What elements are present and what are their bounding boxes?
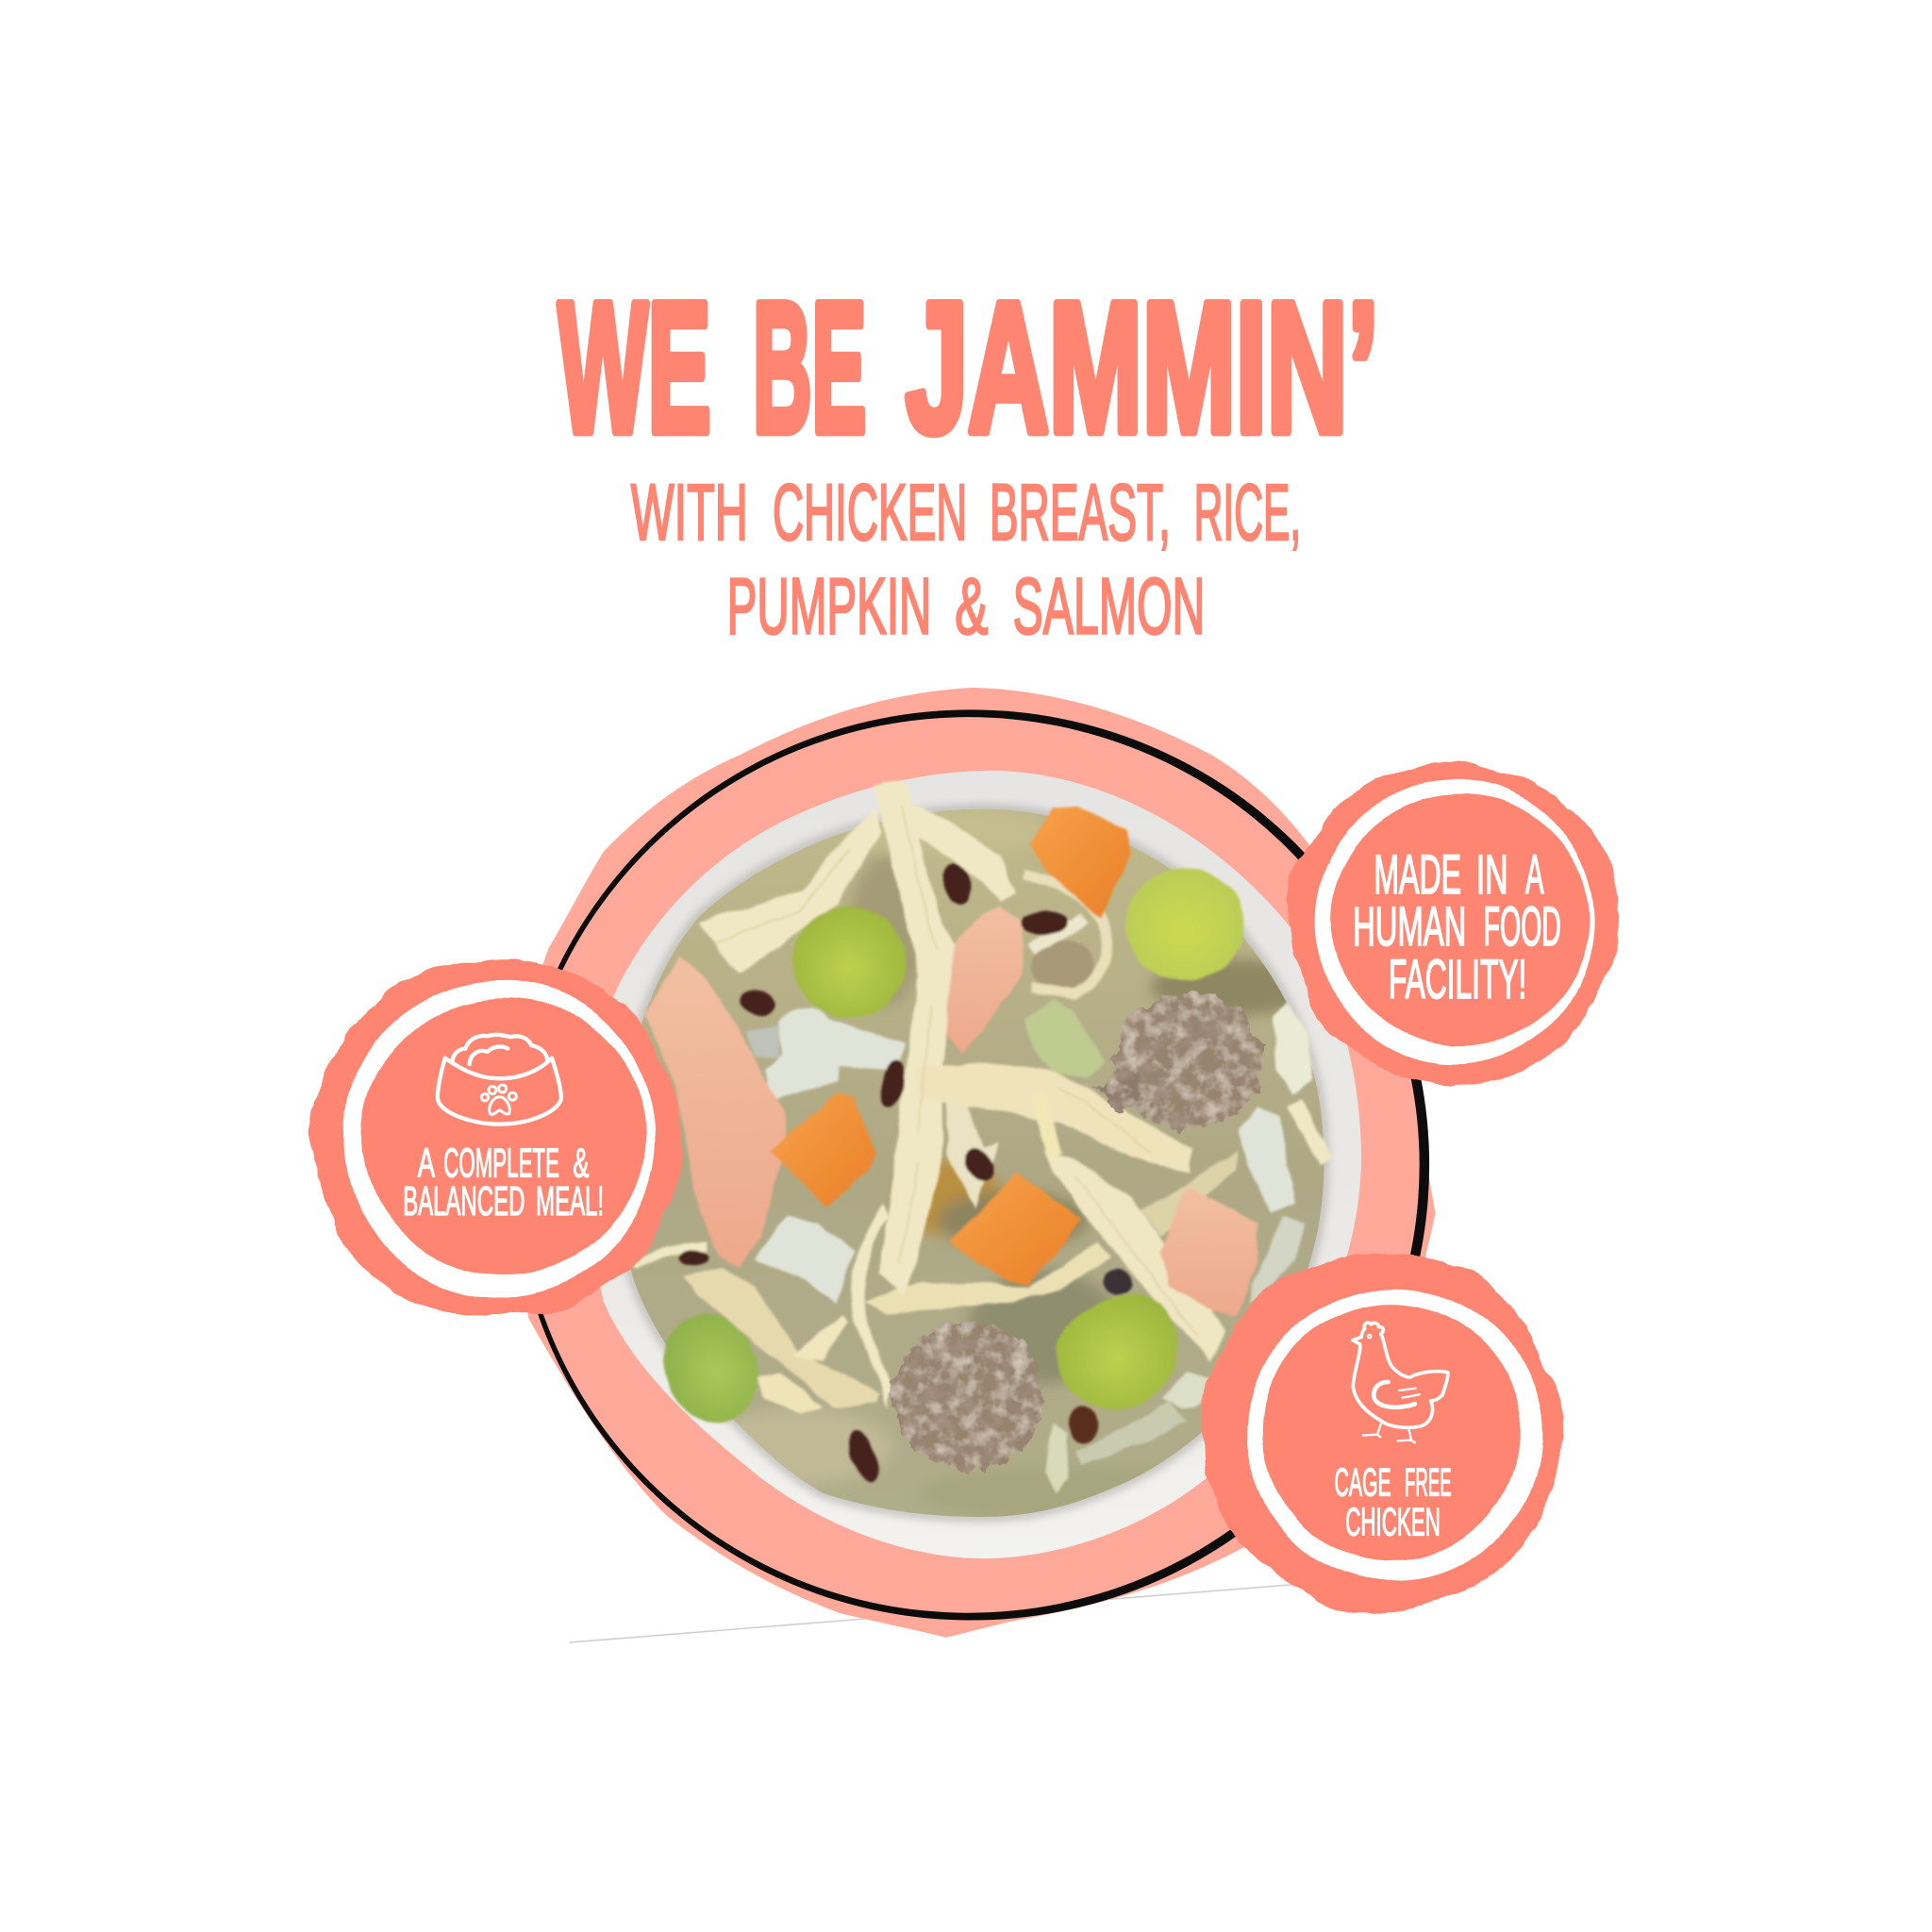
peas and green chunk (649, 869, 1245, 1435)
pink plate (518, 717, 1420, 1613)
food contents (632, 781, 1332, 1493)
noodles (632, 781, 1332, 1413)
badge: complete and balanced meal (311, 958, 684, 1319)
badge text: COMPLETE (443, 1141, 559, 1186)
badge text (403, 1141, 604, 1224)
white ring (343, 981, 656, 1297)
badge text: A (1525, 844, 1544, 906)
carrot pieces (771, 807, 1130, 1288)
badge text: CAGE (1335, 1460, 1391, 1505)
title (558, 264, 1379, 471)
badge disc (311, 958, 684, 1319)
shadow line (569, 1585, 1293, 1642)
badge: cage free chicken (1203, 1251, 1560, 1613)
badge: made in a human food facility (1289, 761, 1619, 1084)
noodle strands (714, 805, 1198, 1337)
bowl inner shadow (624, 809, 1324, 1517)
badge text: IN (1476, 844, 1508, 906)
white ring (1315, 780, 1594, 1063)
subtitle: RICE, (1194, 467, 1301, 557)
subtitle: SALMON (1013, 560, 1205, 650)
badge: made in a human food facility: FOOD (1484, 896, 1561, 958)
subtitle: CHICKEN (773, 467, 967, 557)
badge text: MEAL! (536, 1179, 604, 1224)
badge text (1353, 844, 1561, 1010)
rice chunks (745, 1003, 1313, 1493)
dark beans (679, 861, 1132, 1485)
title: WE (558, 264, 711, 471)
badge text: CHICKEN (1345, 1499, 1441, 1543)
icon: dog bowl (438, 1035, 561, 1124)
subtitle: BREAST, (990, 467, 1171, 557)
black ring (512, 709, 1429, 1621)
pink backing blob (492, 688, 1436, 1638)
badge text: HUMAN (1353, 896, 1466, 958)
subtitle: PUMPKIN (727, 560, 931, 650)
badge text: FACILITY! (1389, 949, 1526, 1010)
badge text (1335, 1460, 1452, 1543)
broth (624, 809, 1324, 1517)
title: JAMMIN’ (906, 264, 1379, 471)
subtitle: & (955, 560, 989, 650)
icon: chicken (1353, 1323, 1448, 1442)
ring noodle (1025, 874, 1107, 993)
badge text: & (573, 1141, 589, 1186)
broth tones (734, 855, 1288, 1517)
title: BE (753, 264, 866, 471)
meatballs (891, 993, 1262, 1470)
badge text: A (418, 1141, 435, 1186)
bowl of food (592, 771, 1361, 1558)
badge text: MADE (1374, 844, 1461, 906)
badge text: BALANCED (403, 1179, 525, 1224)
badge: cage free chicken: FREE (1405, 1460, 1452, 1505)
badge disc (1203, 1251, 1560, 1613)
subtitle (631, 467, 1301, 650)
subtitle: WITH (631, 467, 748, 557)
white bowl (592, 771, 1361, 1558)
white ring (1247, 1288, 1542, 1581)
badge disc (1289, 761, 1619, 1084)
salmon pieces (644, 906, 1257, 1318)
